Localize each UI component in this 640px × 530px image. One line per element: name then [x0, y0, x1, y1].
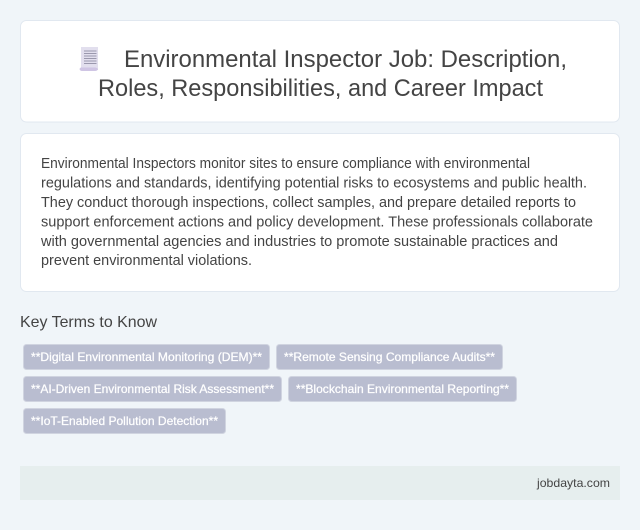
- panel: description: [20, 134, 620, 292]
- description text: with governmental agencies and industries to promote sustainable practices and: [40, 234, 558, 250]
- description text: regulations and standards, identifying potential risks to ecosystems and public health.: [41, 176, 587, 192]
- chip: remote sensing: **Remote Sensing Compliance Audits**: [284, 350, 495, 364]
- chip: iot-enabled: **IoT-Enabled Pollution Detection**: [31, 414, 218, 428]
- footer: [20, 466, 620, 500]
- description text: support enforcement actions and policy development. These professionals collaborate: [41, 214, 593, 230]
- icon: receipt scroll: [80, 47, 98, 71]
- description text: They conduct thorough inspections, collect samples, and prepare detailed reports to: [41, 195, 576, 211]
- chip: ai-driven: **AI-Driven Environmental Risk Assessment**: [31, 382, 274, 396]
- chip: ai-driven: [24, 376, 282, 402]
- description text: [40, 156, 593, 269]
- title text: Roles, Responsibilities, and Career Impact: [98, 75, 543, 102]
- panel: title: [20, 20, 620, 122]
- title text: Environmental Inspector Job: Description,: [124, 46, 567, 73]
- chip: digital environmental monitoring: **Digital Environmental Monitoring (DEM)**: [31, 350, 262, 364]
- chip: iot-enabled: [24, 408, 226, 434]
- chip: blockchain: [288, 376, 516, 402]
- description text: Environmental Inspectors monitor sites to ensure compliance with environmental: [41, 156, 530, 172]
- chip: blockchain: **Blockchain Environmental Reporting**: [296, 382, 509, 396]
- chip: remote sensing: [276, 344, 502, 370]
- chip: digital environmental monitoring: [24, 344, 270, 370]
- footer: jobdayta.com: [536, 476, 610, 490]
- title text: [98, 46, 567, 102]
- description text: prevent environmental violations.: [41, 253, 252, 269]
- heading: key terms: Key Terms to Know: [20, 314, 157, 331]
